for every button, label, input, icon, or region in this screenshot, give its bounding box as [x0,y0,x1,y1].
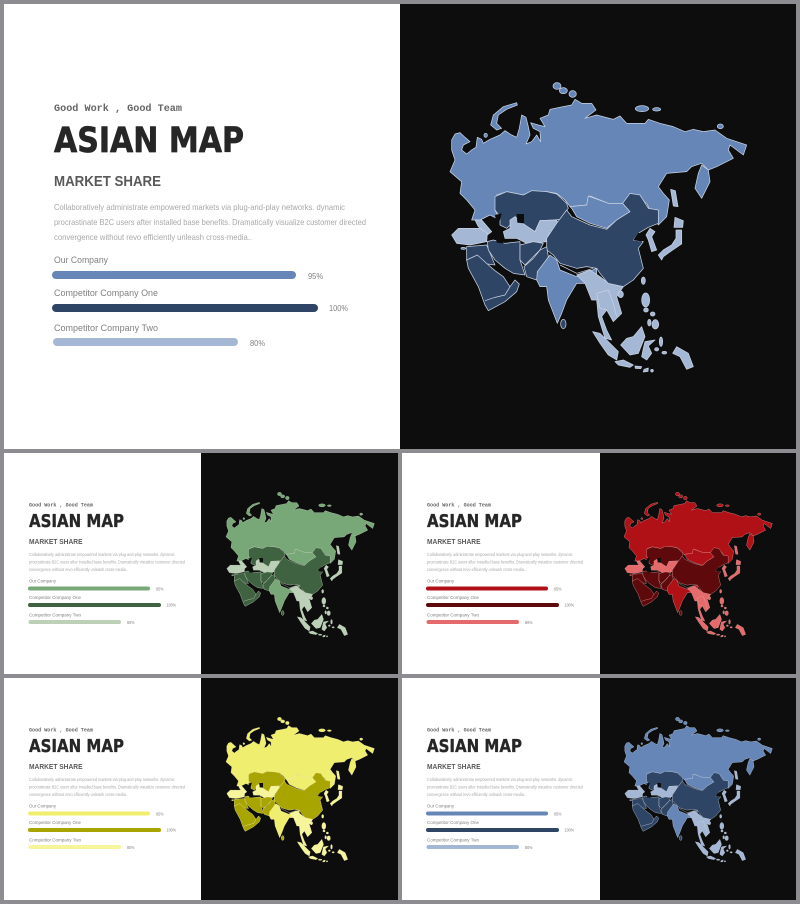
text and bars: MARKET SHARE [427,537,480,546]
text and bars: 100% [564,828,574,832]
panel: main slide [4,4,796,449]
text and bars: procrastinate B2C users after installed base benefits. Dramatically visualize customer directed [427,784,584,790]
text and bars: Collaboratively administrate empowered markets via plug-and-play networks. dynamic [427,552,572,557]
text and bars: Collaboratively administrate empowered markets via plug-and-play networks. dynamic [29,777,174,782]
text and bars: Competitor Company One [29,595,81,601]
text and bars [28,728,186,850]
body text: Collaboratively administrate empowered markets via plug-and-play networks. dynamic [54,202,345,212]
map: asia red [624,492,772,637]
text and bars: ASIAN MAP [427,737,522,757]
text and bars: 100% [166,828,176,832]
tagline: Good Work , Good Team [54,103,182,115]
text and bars: Our Company [29,804,57,810]
text and bars: Competitor Company One [427,595,479,601]
bar: competitor two: Competitor Company Two [54,323,158,334]
text and bars: 95% [554,812,562,816]
text and bars: 95% [156,586,164,592]
bar: competitor one [52,288,348,313]
text and bars: Our Company [427,804,455,810]
text and bars: MARKET SHARE [29,762,82,771]
heading: market share: MARKET SHARE [54,173,161,190]
text and bars: 80% [127,620,135,625]
text and bars: ASIAN MAP [29,737,124,757]
body text: procrastinate B2C users after installed base benefits. Dramatically visualize customer directed [54,217,366,227]
panel: green slide [4,453,398,674]
bar: competitor two [53,323,265,348]
text and bars: convergence without revo efficiently unleash cross-media.. [427,567,526,572]
text and bars: 95% [156,812,164,816]
text and bars [426,502,584,625]
text and bars: procrastinate B2C users after installed base benefits. Dramatically visualize customer directed [29,784,186,790]
text and bars: convergence without revo efficiently unleash cross-media.. [29,567,128,572]
text and bars: Good Work , Good Team [29,728,93,734]
text and bars: 100% [166,602,176,608]
text and bars: 95% [554,586,562,592]
text and bars: Good Work , Good Team [427,502,491,508]
bar: competitor one: Competitor Company One [54,288,158,299]
text and bars: Competitor Company Two [29,838,81,844]
bar: our company: Our Company [54,255,108,266]
text and bars: MARKET SHARE [29,537,82,546]
text and bars: 100% [564,602,574,608]
panel: yellow slide [4,678,398,900]
text and bars: ASIAN MAP [427,512,522,532]
text and bars: Competitor Company One [427,820,479,826]
text and bars: convergence without revo efficiently unleash cross-media.. [29,792,128,797]
map: asia blue [450,83,747,372]
text and bars: Competitor Company Two [427,838,479,844]
map: asia yellow [226,717,374,862]
map: asia green [226,492,374,637]
bar: our company [52,255,323,281]
text and bars: Collaboratively administrate empowered markets via plug-and-play networks. dynamic [427,777,572,782]
map: asia blue small [624,717,772,862]
panel: blue slide small [402,678,796,900]
title: ASIAN MAP [54,121,244,161]
bar: competitor two: 80% [250,338,265,348]
text and bars: convergence without revo efficiently unleash cross-media.. [427,792,526,797]
text and bars: Good Work , Good Team [29,502,93,508]
text and bars: procrastinate B2C users after installed base benefits. Dramatically visualize customer directed [29,560,186,564]
text and bars: 80% [525,620,533,625]
text and bars: Good Work , Good Team [427,728,491,734]
bar: our company: 95% [308,271,323,281]
text and bars: ASIAN MAP [29,512,124,532]
text and bars: Our Company [29,578,57,584]
text and bars: 80% [127,845,135,850]
panel: red slide [402,453,796,674]
text and bars [28,502,186,625]
text and bars: procrastinate B2C users after installed base benefits. Dramatically visualize customer directed [427,560,584,564]
text and bars [426,728,584,850]
bar: competitor one: 100% [329,303,348,313]
body text [54,202,366,242]
text and bars: Competitor Company Two [29,612,81,618]
text and bars: 80% [525,845,533,850]
body text: convergence without revo efficiently unleash cross-media.. [54,232,252,242]
text and bars: Collaboratively administrate empowered markets via plug-and-play networks. dynamic [29,552,174,557]
text and bars: Competitor Company One [29,820,81,826]
text and bars: Competitor Company Two [427,612,479,618]
text and bars: MARKET SHARE [427,762,480,771]
text and bars: Our Company [427,578,455,584]
